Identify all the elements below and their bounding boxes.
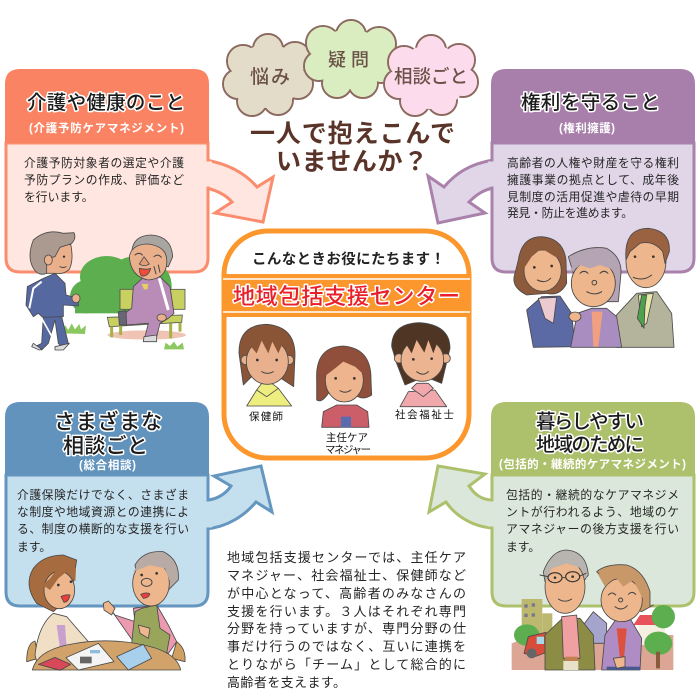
heading: 権利を守ること	[521, 92, 660, 114]
man	[123, 277, 174, 337]
card body	[6, 475, 208, 606]
main question heading	[250, 120, 455, 176]
illustration: consultation at a table	[27, 551, 185, 670]
card body	[6, 143, 208, 272]
arrow: rights to center	[428, 160, 493, 223]
heading: 地域のために	[536, 434, 644, 456]
woman	[35, 613, 88, 662]
cloud: 疑問	[304, 20, 396, 98]
illustration: elderly couple in town	[512, 550, 675, 670]
heading: 介護や健康のこと	[27, 92, 185, 114]
heading: 暮らしやすい	[536, 411, 644, 433]
arrow: community to center	[429, 466, 493, 528]
card header	[5, 69, 209, 143]
body text: な制度や地域資源との連携によ	[17, 505, 189, 519]
paragraph: center explanation: 支援を行います。３人はそれぞれ専門	[227, 604, 466, 619]
clouds: worries, questions, consultation	[223, 20, 478, 116]
staff: social worker: 社会福祉士	[395, 408, 454, 421]
heading: 相談ごと	[63, 435, 148, 458]
body text: 擁護事業の拠点として、成年後	[507, 173, 679, 187]
card header	[491, 69, 695, 143]
heading	[536, 411, 644, 456]
subheading: (介護予防ケアマネジメント)	[29, 121, 184, 135]
heading	[54, 410, 162, 458]
body text: 見制度の活用促進や虐待の早期	[507, 190, 679, 204]
main question heading: 一人で抱えこんで	[250, 120, 455, 148]
paragraph: center explanation: とりながら「チーム」として総合的に	[227, 657, 466, 672]
body text: 発見・防止を進めます。	[507, 206, 633, 220]
arrow: care prevention to center	[206, 160, 273, 222]
elder	[571, 308, 622, 347]
man	[615, 292, 674, 347]
main question heading: いませんか？	[276, 148, 428, 176]
man	[110, 605, 177, 653]
panel: rights protection	[428, 69, 695, 347]
staff: chief care manager: 主任ケア	[326, 431, 368, 444]
cloud: 相談ごと: 相談ごと	[394, 66, 468, 87]
staff: public health nurse	[239, 324, 295, 423]
staff: social worker	[392, 323, 454, 421]
card body	[492, 475, 694, 606]
title band	[223, 274, 470, 317]
cloud: 相談ごと	[384, 35, 478, 116]
heading: さまざまな	[54, 410, 162, 434]
body text	[507, 156, 679, 220]
body text: ントが行われるよう、地域のケ	[506, 505, 679, 519]
body text: を行います。	[24, 190, 94, 204]
body text: ます。	[17, 540, 51, 554]
staff: chief care manager	[317, 346, 372, 456]
cloud: 悩み	[223, 34, 313, 116]
cloud: 悩み: 悩み	[250, 66, 290, 88]
card header	[491, 402, 695, 475]
center box outline	[224, 231, 469, 458]
subheading: (包括的・継続的ケアマネジメント)	[499, 457, 686, 471]
paragraph: center explanation: が中心となって、高齢者のみなさんの	[227, 586, 466, 601]
body text: 介護予防対象者の選定や介護	[24, 156, 184, 170]
subheading: (総合相談)	[79, 458, 136, 472]
paragraph: center explanation: 事だけ行うのではなく、互いに連携を	[227, 639, 466, 654]
body text	[17, 488, 189, 554]
card header	[5, 402, 209, 475]
body text: 予防プランの作成、評価など	[24, 173, 184, 187]
body text	[506, 488, 679, 554]
card body	[492, 143, 694, 272]
illustration: family of three	[514, 228, 674, 347]
paragraph: center explanation: 高齢者を支えます。	[227, 675, 346, 690]
staff: chief care manager: マネジャー	[325, 444, 371, 456]
body text: 包括的・継続的なケアマネジメ	[506, 488, 679, 502]
panel: community support	[429, 402, 695, 670]
body text: る、制度の横断的な支援を行い	[17, 522, 189, 536]
panel: general consultation	[5, 402, 272, 670]
paragraph: center explanation: マネジャー、社会福祉士、保健師など	[227, 568, 466, 583]
body text	[24, 156, 184, 204]
body text: アマネジャーの後方支援を行い	[506, 522, 679, 536]
walking woman	[35, 315, 68, 350]
arrow: consultation to center	[206, 466, 272, 529]
paragraph: center explanation: 分野を持っていますが、専門分野の仕	[227, 621, 466, 636]
body text: 高齢者の人権や財産を守る権利	[507, 156, 679, 170]
title band: 地域包括支援センター	[233, 284, 460, 309]
staff: public health nurse: 保健師	[249, 410, 284, 423]
body text: 介護保険だけでなく、さまざま	[17, 488, 189, 502]
man	[545, 618, 595, 670]
cloud: 疑問: 疑問	[328, 50, 369, 70]
panel: care prevention	[5, 69, 273, 350]
body text: ます。	[506, 540, 540, 554]
illustration: walking woman and man on bench	[26, 232, 186, 350]
woman	[514, 237, 567, 295]
woman	[602, 618, 642, 670]
paragraph: center explanation: 地域包括支援センターでは、主任ケア	[227, 550, 466, 565]
subheading: (権利擁護)	[559, 121, 615, 135]
table	[32, 641, 181, 670]
paragraph: center explanation	[227, 550, 466, 690]
center box lead text: こんなときお役にたちます！	[252, 250, 445, 268]
panel: community support center	[223, 231, 470, 458]
